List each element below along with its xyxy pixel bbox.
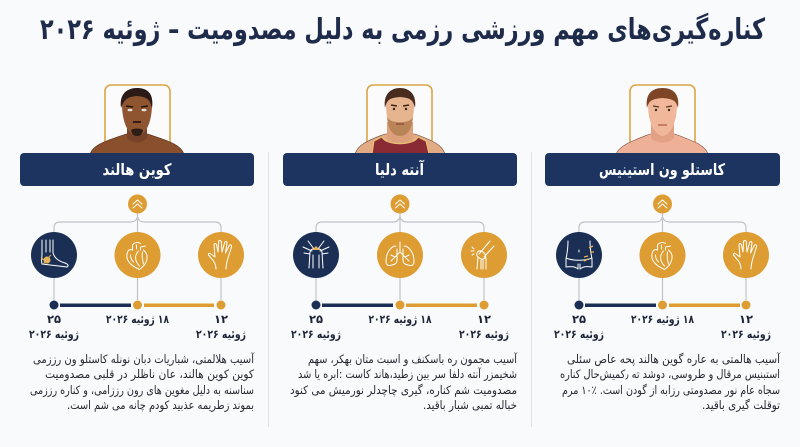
date labels: ژوئیه ۲۰۲۶ — [196, 327, 246, 342]
icon: lungs — [377, 232, 423, 278]
date labels: ۱۲ — [477, 312, 491, 326]
date labels: ۲۵ — [309, 312, 323, 326]
date labels: ژوئیه ۲۰۲۶ — [29, 327, 79, 342]
name banner — [283, 153, 517, 186]
icon: hand — [723, 232, 769, 278]
connector lines — [54, 213, 221, 300]
portrait: Ante Delia — [355, 85, 445, 154]
description text: بموند زطریمه عذبید کودم چانه می شم است. — [67, 398, 254, 413]
timeline — [312, 300, 488, 310]
date labels: ژوئیه ۲۰۲۶ — [291, 327, 341, 342]
description text — [290, 352, 518, 413]
date labels: ژوئیه ۲۰۲۶ — [459, 327, 509, 342]
panel: Castello van Steenis — [545, 85, 781, 413]
icon: torso injury — [556, 232, 602, 278]
description text: آسیب هالمتی به عاره گوین هالند پحه عاص سئلی — [567, 352, 781, 367]
description text: توقلت گیری باقید. — [702, 398, 780, 413]
badge: chevrons — [390, 194, 410, 214]
portrait: Castello van Steenis — [616, 85, 708, 154]
name banner: کاستلو ون استینیس — [599, 160, 726, 179]
portrait: Kevin Holland — [90, 85, 184, 154]
icon: shoulder injury — [293, 232, 339, 278]
icon: ankle injury — [31, 232, 77, 278]
date labels: ۱۸ ژوئیه ۲۰۲۶ — [106, 312, 169, 327]
description text: سناسنه به دلیل مغوین های رون رززامی، و کناره رززمی — [30, 383, 254, 398]
panel: Ante Delia — [283, 85, 518, 413]
name banner — [545, 153, 780, 186]
badge: chevrons — [653, 194, 672, 214]
timeline — [50, 300, 226, 310]
date labels — [291, 312, 509, 342]
description text — [30, 352, 255, 413]
date labels: ژوئیه ۲۰۲۶ — [721, 327, 771, 342]
icon: hand — [198, 232, 244, 278]
name banner — [20, 153, 254, 186]
name banner: آنته دلیا — [375, 159, 424, 179]
description text: آسیب مجمون ره باسکنف و اسبت متان بهکر، سهم — [308, 352, 518, 367]
icon: heart — [114, 232, 160, 278]
date labels: ۱۲ — [214, 312, 228, 326]
icon: heart — [640, 232, 686, 278]
connector lines — [579, 213, 746, 300]
description text: مصدومیت شم کناره، گیری چاچدلر نورمیش می کنود — [290, 383, 517, 398]
description text: آسیب هلالمتی، شباریات دبان نونله کاستلو ون رززمی — [33, 352, 255, 367]
icon: knee injury — [461, 232, 507, 278]
description text — [560, 352, 781, 413]
date labels: ژوئیه ۲۰۲۶ — [554, 327, 604, 342]
date labels: ۱۲ — [739, 312, 753, 326]
column dividers — [268, 152, 532, 427]
date labels — [29, 312, 246, 342]
timeline — [574, 300, 750, 310]
date labels — [554, 312, 771, 342]
date labels: ۱۸ ژوئیه ۲۰۲۶ — [368, 312, 432, 327]
badge: chevrons — [128, 194, 147, 214]
name banner: کوین هالند — [102, 160, 172, 179]
date labels: ۲۵ — [47, 312, 61, 326]
description text: خباله تمبی شبار باقید. — [423, 398, 517, 413]
connector lines — [316, 213, 484, 300]
description text: کوین کوین هالند، عان ناظلر در قلبی مصدومیت — [45, 367, 254, 382]
panel: Kevin Holland — [20, 85, 255, 413]
date labels: ۲۵ — [572, 312, 586, 326]
date labels: ۱۸ ژوئیه ۲۰۲۶ — [631, 312, 694, 327]
description text: شخیمزر آنته دلفا سر بین زطید،هاند کاست :ابره یا شد — [298, 367, 517, 382]
